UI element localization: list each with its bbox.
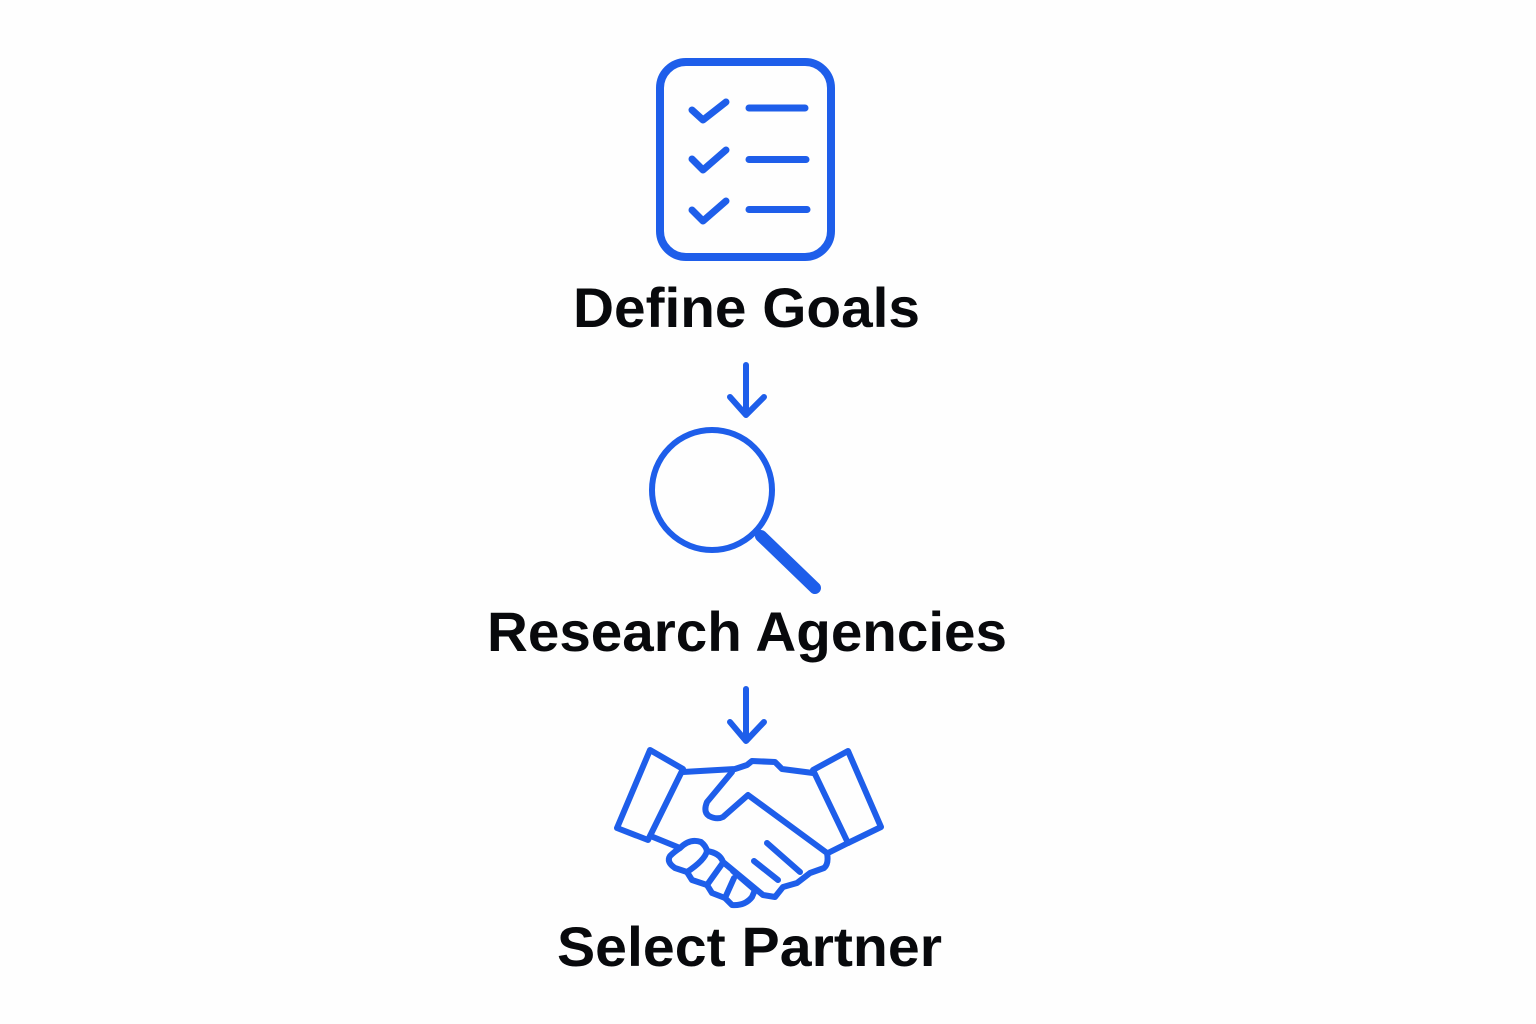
icon: magnifying glass <box>652 430 815 588</box>
heading: Define Goals: Define Goals <box>573 276 920 339</box>
arrow: goals to research <box>730 365 764 415</box>
heading: Research Agencies: Research Agencies <box>487 600 1007 663</box>
heading: Select Partner: Select Partner <box>557 915 942 978</box>
icon: checklist <box>660 62 831 257</box>
arrow: research to partner <box>730 689 764 741</box>
icon: handshake <box>617 750 881 905</box>
